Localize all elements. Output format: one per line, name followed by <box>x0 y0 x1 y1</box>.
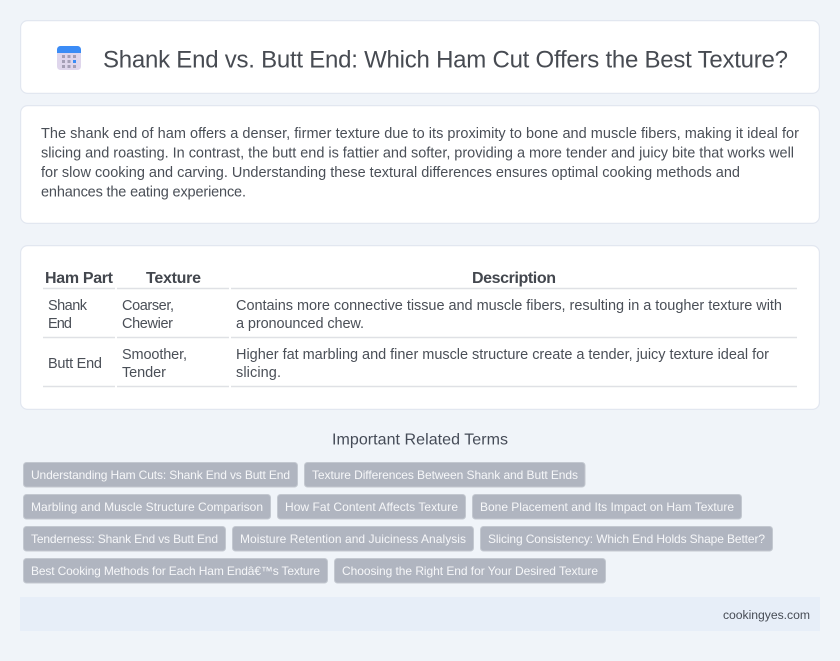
table row: shank end: Contains more connective tissue and muscle fibers, resulting in a tougher texture with <box>236 298 782 314</box>
tag <box>278 494 466 519</box>
table row: butt end: slicing. <box>236 365 281 381</box>
tag: Tenderness: Shank End vs Butt End <box>31 532 218 546</box>
tag: Texture Differences Between Shank and Butt Ends <box>312 468 578 482</box>
table row: shank end: Shank <box>48 298 88 314</box>
tag <box>24 462 298 487</box>
title text: Shank End vs. Butt End: Which Ham Cut Offers the Best Texture? <box>103 46 788 74</box>
tag <box>334 558 606 583</box>
intro text: The shank end of ham offers a denser, firmer texture due to its proximity to bone and muscle fibers, making it ideal for <box>41 126 799 142</box>
tag: Marbling and Muscle Structure Comparison <box>31 500 263 514</box>
table row: butt end <box>48 347 769 381</box>
footer <box>20 597 820 631</box>
related terms heading: Important Related Terms <box>332 432 508 448</box>
table row: butt end: Butt End <box>48 356 102 372</box>
tag <box>24 494 270 519</box>
table row: shank end: End <box>48 316 72 332</box>
tag: Moisture Retention and Juiciness Analysis <box>240 532 466 546</box>
icon: calendar <box>57 46 81 70</box>
tag <box>480 526 772 551</box>
table row: shank end: a pronounced chew. <box>236 316 364 332</box>
table header <box>45 270 556 287</box>
tag <box>24 526 226 551</box>
intro text: slicing and roasting. In contrast, the butt end is fattier and softer, providing a more tender and juicy bite that works well <box>41 146 794 162</box>
table header: Description <box>472 270 556 287</box>
related terms tags <box>24 462 772 583</box>
table header: Ham Part <box>45 270 114 287</box>
panel: title <box>21 21 819 93</box>
table row: shank end <box>48 298 782 332</box>
tag <box>304 462 585 487</box>
intro text: enhances the eating experience. <box>41 184 246 200</box>
table row: shank end: Chewier <box>122 316 173 332</box>
tag: How Fat Content Affects Texture <box>285 500 458 514</box>
tag: Best Cooking Methods for Each Ham Endâ€™s Texture <box>31 564 320 578</box>
table header: Texture <box>146 270 201 287</box>
table row: butt end: Higher fat marbling and finer muscle structure create a tender, juicy texture ideal for <box>236 347 769 363</box>
tag: Bone Placement and Its Impact on Ham Texture <box>480 500 734 514</box>
table row: shank end: Coarser, <box>122 298 174 314</box>
panel: comparison table <box>21 246 819 409</box>
tag: Slicing Consistency: Which End Holds Shape Better? <box>488 532 765 546</box>
tag <box>24 558 328 583</box>
footer: cookingyes.com <box>723 608 810 622</box>
intro text <box>41 126 799 200</box>
tag <box>232 526 474 551</box>
panel: introduction <box>21 106 819 223</box>
tag: Choosing the Right End for Your Desired Texture <box>342 564 598 578</box>
table row: butt end: Tender <box>122 365 166 381</box>
intro text: for slow cooking and carving. Understanding these textural differences ensures optimal cooking methods and <box>41 165 740 181</box>
tag <box>472 494 742 519</box>
tag: Understanding Ham Cuts: Shank End vs Butt End <box>31 468 290 482</box>
table row: butt end: Smoother, <box>122 347 187 363</box>
